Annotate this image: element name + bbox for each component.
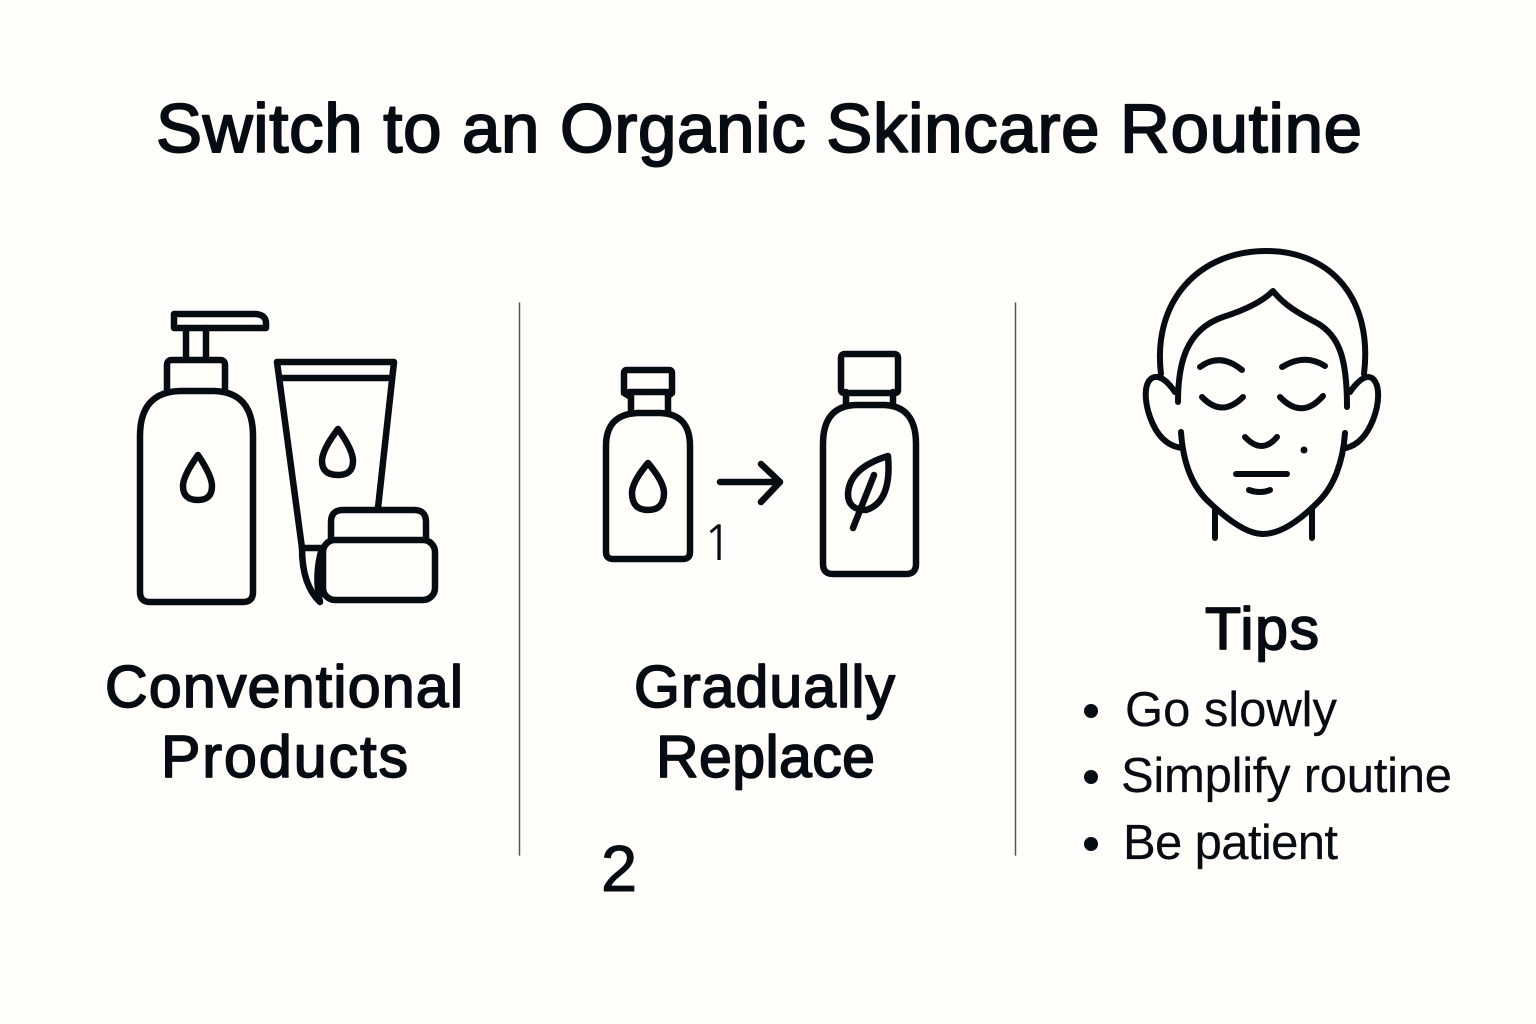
tip: be patient: Be patient: [1123, 816, 1338, 870]
heading: conventional products: Products: [161, 724, 408, 790]
icon: bottle swap: [606, 354, 916, 574]
title: Switch to an Organic Skincare Routine: [156, 90, 1362, 167]
icon: face: [1146, 251, 1378, 538]
heading: gradually replace: Replace: [656, 724, 875, 790]
icon: tube: [277, 362, 394, 602]
label: step number 2: 2: [601, 832, 637, 905]
tip: go slowly: Go slowly: [1125, 683, 1338, 737]
heading: gradually replace: [634, 654, 896, 790]
icon: jar: [323, 510, 435, 600]
tip: simplify routine: Simplify routine: [1121, 749, 1452, 803]
list: tips: [1084, 683, 1452, 870]
heading: conventional products: Conventional: [105, 654, 463, 720]
icon: pump bottle: [140, 314, 266, 602]
icon: conventional products: [140, 314, 435, 602]
icon: drop bottle: [606, 370, 690, 559]
heading: conventional products: [105, 654, 463, 790]
icon: leaf bottle: [823, 354, 916, 574]
label: step number 1: 1: [703, 519, 732, 567]
heading: gradually replace: Gradually: [634, 654, 896, 720]
heading: tips: Tips: [1205, 596, 1319, 662]
arrow: [720, 464, 780, 502]
